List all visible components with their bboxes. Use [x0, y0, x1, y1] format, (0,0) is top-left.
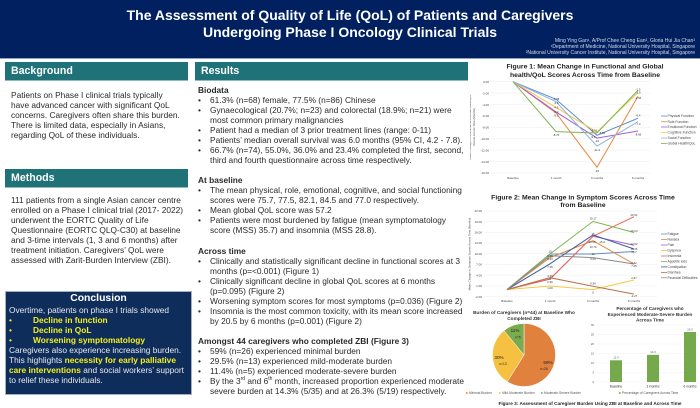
figure 1 line chart: -4.00	[482, 103, 489, 107]
subsection: across time	[198, 246, 463, 326]
conclusion text: to relief these individuals.	[9, 375, 103, 385]
figure 1 line chart: -5.5	[554, 114, 559, 118]
figure 2 title: from Baseline	[560, 202, 606, 209]
figure 1 line chart: -6.00	[482, 114, 489, 118]
figure 1 line chart	[470, 64, 697, 180]
subsection: biodata: third and fourth questionnaire across time respectively.	[210, 155, 412, 165]
figure 2 line chart: 1 month	[545, 299, 556, 303]
figure 2 line chart: -2.00	[475, 295, 482, 299]
figure 1 title	[506, 64, 664, 79]
subsection: biodata: Patients’ median overall survival was 6.0 months (95% CI, 4.2 - 7.8).	[210, 135, 462, 145]
subsection: caregivers: 59% (n=26) experienced minimal burden	[210, 346, 361, 356]
figure 2 line chart: Pain	[668, 243, 674, 247]
subsection: biodata: Biodata	[198, 85, 229, 95]
figure 3 pie chart: caregiver burden: n=5	[515, 336, 521, 340]
subsection: across time: Clinically significant decline in global QoL scores at 6 months	[210, 276, 435, 286]
conclusion text: care interventions and social workers’ support	[9, 365, 184, 375]
text: background: have advanced cancer with significant QoL	[11, 100, 170, 110]
subsection: at baseline: The mean physical, role, emotional, cognitive, and social functioning	[210, 185, 462, 195]
figure 1 line chart: Role Function	[668, 120, 689, 124]
figure 1 line chart: -10	[595, 139, 599, 143]
authors and affiliations: ²National University Cancer Institute, National University Hospital, Singapore	[526, 50, 695, 56]
header banner	[0, 0, 700, 59]
pie legend: Mild-Moderate Burden	[502, 391, 535, 395]
subsection: at baseline	[198, 175, 462, 235]
subsection: at baseline: At baseline	[198, 175, 243, 185]
subsection: biodata: Patient had a median of 3 prior treatment lines (range: 0-11)	[210, 125, 431, 135]
figure 1 line chart: -3.5	[554, 101, 559, 105]
figure 1 line chart: -8.85	[599, 131, 606, 135]
figure 2 line chart: 16.03	[630, 229, 638, 233]
figure 1 line chart: -14.00	[480, 160, 489, 164]
heading: results: Results	[201, 65, 239, 77]
text: methods: and 3-time intervals (1, 3 and 6 months) after	[11, 235, 178, 245]
figure 2 line chart: Financial Difficulties	[668, 276, 698, 280]
text: methods: treatment initiation. Caregivers’ QoL were	[11, 245, 164, 255]
figure 3 bar chart: moderate-severe burden: 0	[592, 380, 594, 384]
subsection: across time: (p=0.095) (Figure 2)	[210, 286, 284, 296]
figure 1 line chart: -8.00	[482, 126, 489, 130]
figure 2 line chart: Constipation	[668, 265, 686, 269]
bar chart title	[608, 306, 692, 323]
figure 2 line chart: Insomnia	[668, 254, 681, 258]
figure 1 line chart: Physical Function	[668, 114, 694, 118]
figure 2 line chart: 20.51	[630, 213, 638, 217]
figure 1 line chart: -6.4	[636, 114, 641, 118]
figure 2 line chart: 6 months	[628, 299, 641, 303]
conclusion text: •	[9, 335, 12, 345]
subsection: across time: Clinically and statistically significant decline in functional scores at 3	[210, 256, 460, 266]
subsection: biodata: Gynaecological (20.7%; n=23) and colorectal (18.9%; n=21) were	[210, 105, 452, 115]
pie legend: Minimal Burden	[469, 391, 492, 395]
subsection: caregivers	[198, 336, 464, 396]
figure 2 line chart: 11.46	[631, 247, 638, 251]
figure 2 line chart: 22.00	[474, 209, 482, 213]
figure 2 line chart: 13.76	[590, 245, 597, 249]
figure 3 bar chart: moderate-severe burden: 3 months	[646, 384, 660, 388]
figure 3 bar chart: moderate-severe burden: 26.3	[687, 328, 693, 332]
conclusion heading: Conclusion	[70, 293, 127, 304]
authors and affiliations: Ming Ying Gan¹, A/Prof Chee Cheng Ean², Gloria Hui Jia Chan²	[555, 38, 695, 44]
bar chart title: Across Time	[636, 318, 664, 323]
text: background: Patients on Phase I clinical trials typically	[11, 90, 163, 100]
figure 2 line chart: 7.42	[631, 261, 637, 265]
figure 2 line chart: 3.36	[547, 274, 553, 278]
subsection: biodata: most common primary malignancies	[210, 115, 344, 125]
figure 1 line chart: -7.0	[636, 122, 641, 126]
conclusion text	[9, 305, 184, 385]
figure 2 line chart: 4.00	[476, 273, 482, 277]
figure 1 line chart: -12.00	[480, 148, 489, 152]
figure 2 title	[491, 194, 675, 209]
figure 1 line chart: -8.65	[635, 132, 642, 136]
figure 2 line chart: 19.00	[474, 220, 482, 224]
figure 1 line chart: -16.00	[480, 171, 489, 175]
figure 1 line chart: -1.5	[636, 88, 641, 92]
figure 2 line chart: 16.00	[474, 231, 482, 235]
figure 3 caption: Figure 3: Assessment of Caregiver Burden Using ZBI at Baseline and Across Time	[499, 400, 681, 406]
conclusion text: Decline in QoL	[33, 325, 91, 335]
figure 2 line chart: Diarrhea	[668, 271, 681, 275]
figure 2 line chart: 0	[592, 290, 594, 294]
text: background: regarding QoL of these individuals.	[11, 130, 140, 140]
figure 2 line chart: Dyspnea	[668, 249, 681, 253]
figure 3 bar chart: moderate-severe burden: 6 months	[683, 384, 697, 388]
figure 1 line chart: -9.4	[591, 135, 596, 139]
bar chart title: Percentage of Caregivers who	[616, 306, 684, 311]
figure 1 line chart: -8.16	[591, 128, 598, 132]
authors and affiliations	[526, 38, 695, 56]
figure 2 title: Figure 2: Mean Change in Symptom Scores Across Time	[491, 194, 675, 202]
figure 3 bar chart: moderate-severe burden: 10	[591, 361, 594, 365]
bars	[610, 332, 696, 382]
figure 2 line chart: 10	[548, 250, 552, 254]
figure 3 bar chart: moderate-severe burden: 20	[591, 342, 594, 346]
figure 1 line chart: -11.3	[594, 148, 601, 152]
subsection: at baseline: Mean global QoL score was 57.2	[210, 205, 332, 215]
text: methods: Questionnaire (EORTC QLQ-C30) at baseline	[11, 225, 181, 235]
subsection: across time: by 20.5 by 6 months (p=0.001) (Figure 2)	[210, 316, 362, 326]
heading: background: Background	[11, 65, 73, 77]
figure 2 line chart: 3 months	[587, 299, 600, 303]
figure 2 line chart: -1.27	[631, 294, 638, 298]
figure 3 bar chart: moderate-severe burden: 25	[591, 332, 594, 336]
text: background: concerns. Caregivers often share this burden.	[11, 110, 180, 120]
pie slices	[492, 323, 556, 386]
bar legend: Percentage of Caregivers Across Time	[622, 391, 678, 395]
subsection: caregivers: Amongst 44 caregivers who completed ZBI (Figure 3)	[198, 336, 409, 346]
figure 2 line chart: 7.00	[476, 263, 482, 267]
figure 1 line chart: -1.9	[636, 90, 641, 94]
pie title: Burden of Caregivers (n=44) at Baseline Who	[473, 310, 575, 316]
figure 1 line chart: -8.75	[553, 133, 560, 137]
figure 2 line chart: 1.00	[476, 284, 482, 288]
pie legend	[466, 391, 581, 395]
figure 3 bar chart: moderate-severe burden: Baseline	[610, 384, 622, 388]
figure 3 pie chart: caregiver burden: 30%	[494, 355, 504, 360]
figure 1 line chart: -5.3	[554, 110, 559, 114]
figure 2 line chart: Baseline	[501, 299, 513, 303]
heading: methods: Methods	[11, 172, 55, 184]
figure 1 line chart: Emotional Function	[668, 125, 697, 129]
figure 3 bar chart: moderate-severe burden: 5	[592, 370, 594, 374]
subsection: caregivers: 29.5% (n=13) experienced mild-moderate burden	[210, 356, 392, 366]
heading: methods	[5, 169, 188, 188]
conclusion text: This highlights necessity for early palliative	[9, 355, 176, 365]
figure 2 line chart: 19.17	[590, 216, 597, 220]
figure 3 pie chart: caregiver burden: 59%	[543, 360, 553, 365]
subsection: across time: months (p=<0.001) (Figure 1)	[210, 266, 319, 276]
figure 1 line chart: -4.5	[554, 106, 559, 110]
figure 2 line chart: Fatigue	[668, 232, 679, 236]
subsection: biodata: 61.3% (n=68) female, 77.5% (n=86) Chinese	[210, 95, 376, 105]
pie title	[473, 310, 575, 322]
figure 2 line chart: 14.58	[588, 240, 596, 244]
conclusion text: Decline in function	[33, 315, 108, 325]
title: Undergoing Phase I Oncology Clinical Trials	[203, 24, 497, 40]
figure 3 bar chart: moderate-severe burden: 30	[591, 323, 594, 327]
figure 2 line chart: 9.03	[590, 257, 596, 261]
figure 1 line chart: Cognitive Function	[668, 131, 696, 135]
figure 2 line chart: 13.00	[474, 241, 482, 245]
figure 2 line chart: 10	[591, 252, 595, 256]
subsection: at baseline: Patients were most burdened by fatigue (mean symptomatology	[210, 215, 446, 225]
text: methods: assessed with Zarit-Burden Interview (ZBI).	[11, 255, 171, 265]
figure 2 line chart: Nausea	[668, 238, 679, 242]
figure 1 line chart: -2.56	[635, 96, 642, 100]
subsection: biodata: 66.7% (n=74), 55.0%, 36.0% and 23.4% completed the first, second,	[210, 145, 463, 155]
bar chart title: Experienced Moderate-Severe Burden	[608, 312, 692, 317]
figure 3 bar chart: moderate-severe burden	[591, 306, 697, 395]
text: methods: 111 patients from a single Asian cancer centre	[11, 195, 181, 205]
figure 1 title: health/QoL Scores Across Time from Baseline	[510, 72, 660, 79]
figure 1 line chart: Social Function	[668, 136, 691, 140]
title: The Assessment of Quality of Life (QoL) of Patients and Caregivers	[127, 6, 573, 22]
subsection: biodata	[198, 85, 463, 165]
text: background	[11, 90, 180, 140]
conclusion text: •	[9, 315, 12, 325]
subsection: across time: Insomnia is the most common toxicity, with its mean score increased	[210, 306, 463, 316]
subsection: at baseline: score (MSS) 35.7) and insomnia (MSS 28.8).	[210, 225, 376, 235]
figure 2 line chart	[468, 194, 698, 303]
conclusion text: Caregivers also experience increasing burden.	[9, 345, 181, 355]
figure 1 title: Figure 1: Mean Change in Functional and Global	[506, 64, 664, 70]
figure 3 bar chart: moderate-severe burden: 14.3	[650, 350, 656, 354]
subsection: caregivers: By the 3rd and 6th month, increased proportion experienced moderate	[210, 376, 464, 386]
panel: conclusion	[5, 291, 192, 395]
text: methods	[11, 195, 183, 265]
figure 2 line chart: 10.00	[474, 252, 482, 256]
subsection: caregivers: 11.4% (n=5) experienced moderate-severe burden	[210, 366, 397, 376]
heading: results	[195, 62, 468, 81]
text: background: There is limited data, especially in Asians,	[11, 120, 165, 130]
figure 2 line chart: 9.23	[547, 257, 553, 261]
text: results	[198, 85, 464, 396]
figure 2 line chart: 0.94	[590, 282, 596, 286]
figure 1 line chart: -10.00	[480, 137, 489, 141]
figure 1 line chart: Global Health/QoL	[668, 142, 696, 146]
conclusion text: •	[9, 325, 12, 335]
figure 3 bar chart: moderate-severe burden: 11.4	[613, 356, 619, 360]
figure 1 line chart: Scores Across Time (Months)	[472, 108, 476, 146]
text: methods: underwent the EORTC Quality of Life	[11, 215, 149, 225]
conclusion text: Overtime, patients on phase I trials showed	[9, 305, 169, 315]
figure 1 line chart: Baseline	[507, 176, 519, 180]
figure 1 line chart: 0.00	[483, 80, 489, 84]
figure 2 line chart: 9.50	[547, 254, 553, 258]
figure 2 line chart: 12.62	[630, 242, 638, 246]
figure 1 line chart: -2.00	[482, 91, 489, 95]
figure 2 line chart: 15.4	[599, 240, 605, 244]
pie legend: Moderate-Severe Burden	[544, 391, 581, 395]
figure 3 pie chart: caregiver burden: 11%	[511, 328, 519, 333]
figure 2 line chart: 2.67	[631, 276, 637, 280]
figure 2 line chart: 3	[549, 277, 551, 281]
conclusion text: Worsening symptomatology	[33, 335, 145, 345]
figure 2 line chart: 2.90	[547, 280, 553, 284]
subsection: at baseline: scores were 75.7, 77.5, 82.1, 84.5 and 77.0 respectively.	[210, 195, 419, 205]
figure 1 line chart: 6 months	[632, 176, 645, 180]
figure 1 line chart: -15	[595, 169, 599, 173]
authors and affiliations: ¹Department of Medicine, National University Hospital, Singapore	[551, 44, 695, 50]
figure 2 line chart: 10.7	[631, 250, 637, 254]
subsection: caregivers: severe burden at 14.3% (5/35) and at 26.3% (5/19) respectively.	[210, 386, 446, 396]
figure 3 pie chart: caregiver burden: n=13	[499, 362, 507, 366]
figure 1 line chart: 1 month	[551, 176, 562, 180]
figure 1 line chart: -3.08	[553, 97, 560, 101]
figure 2 line chart: 7.05	[631, 264, 637, 268]
figure 1 line chart: 3 months	[591, 176, 604, 180]
subsection: across time: Worsening symptom scores for most symptoms (p=0.036) (Figure 2)	[210, 296, 462, 306]
figure 3 pie chart: caregiver burden	[466, 310, 581, 395]
pie title: Completed ZBI	[507, 316, 541, 322]
figure 2 line chart: Mean Change in Symptom Scores Across Time (Months)	[468, 218, 472, 290]
heading: background	[5, 62, 188, 81]
text: methods: enrolled on a Phase I clinical trial (2017- 2022)	[11, 205, 183, 215]
figure 3 bar chart: moderate-severe burden: 15	[591, 352, 594, 356]
subsection: across time: Across time	[198, 246, 246, 256]
figure 3 pie chart: caregiver burden: n=26	[540, 367, 548, 371]
title	[126, 6, 573, 40]
figure 2 line chart: 15	[591, 232, 595, 236]
figure 2 line chart: Appetite loss	[668, 260, 687, 264]
figure 2 line chart: 7.25	[547, 265, 553, 269]
figure 2 line chart: 1.00	[547, 286, 553, 290]
